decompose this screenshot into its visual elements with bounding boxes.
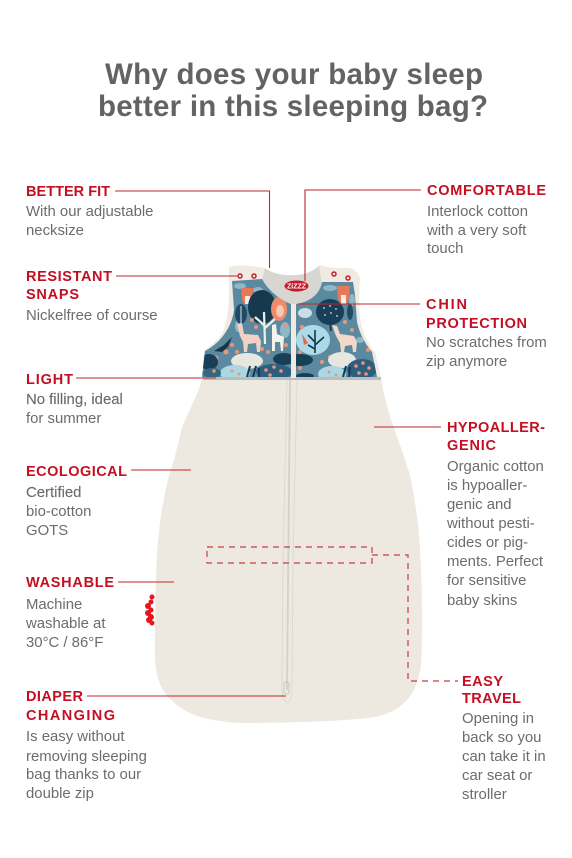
callout: chin protection: No scratches from <box>426 335 547 351</box>
light blue tree circle <box>296 325 330 355</box>
callout: washable: Machine <box>26 597 82 613</box>
callout: easy travel <box>207 547 546 803</box>
brand logo: neck: ZiZZZ <box>287 284 307 290</box>
brand logo: neck <box>284 280 308 292</box>
callout: comfortable <box>305 183 546 281</box>
callout: diaper changing: bag thanks to our <box>26 767 141 783</box>
callout: comfortable: COMFORTABLE <box>427 183 546 199</box>
bushes <box>296 354 313 366</box>
callout: comfortable: touch <box>427 241 463 257</box>
forest print: right panel <box>296 282 377 377</box>
callout: easy travel: back so you <box>462 730 541 746</box>
brand logo: side <box>145 594 154 626</box>
callout: better fit: With our adjustable <box>26 204 153 220</box>
callout: resistant snaps <box>26 269 237 324</box>
callout: washable: washable at <box>25 616 106 632</box>
callout: hypoallergenic: HYPOALLER- <box>447 420 545 436</box>
callout: light: LIGHT <box>26 372 73 388</box>
callout: diaper changing: double zip <box>26 786 94 802</box>
callout: resistant snaps: Nickelfree of course <box>26 308 158 324</box>
callout: light: for summer <box>26 411 101 427</box>
salmon flowers <box>298 320 370 370</box>
forest print: left panel <box>202 279 291 377</box>
snaps <box>238 272 350 280</box>
callout: easy travel: Opening in <box>462 711 534 727</box>
zip placket upper <box>291 304 296 378</box>
callout: easy travel: can take it in <box>462 749 546 765</box>
callout: hypoallergenic: genic and <box>447 497 512 513</box>
callout: resistant snaps: SNAPS <box>26 287 79 303</box>
callout: washable: WASHABLE <box>26 575 114 591</box>
callout: hypoallergenic: baby skins <box>447 593 517 609</box>
foliage <box>323 285 364 343</box>
callout: easy travel: EASY <box>462 674 503 690</box>
inner neck <box>262 266 322 304</box>
squirrel <box>214 337 232 352</box>
callout: hypoallergenic: GENIC <box>447 438 497 454</box>
fox <box>337 286 350 304</box>
callout: light <box>26 372 216 427</box>
zip <box>282 380 297 702</box>
callout: ecological: GOTS <box>26 523 68 539</box>
callout: easy travel: TRAVEL <box>462 691 521 707</box>
callout: better fit: necksize <box>26 223 84 239</box>
callout: diaper changing <box>26 689 286 802</box>
callout: diaper changing: CHANGING <box>26 708 115 724</box>
callout: comfortable: with a very soft <box>426 223 527 239</box>
bushes <box>203 354 218 370</box>
small dark tree <box>235 304 247 324</box>
fox <box>241 288 253 304</box>
large tree <box>248 290 276 324</box>
salmon flowers <box>214 318 288 360</box>
callout: light: No filling, ideal <box>26 392 123 408</box>
callout: hypoallergenic: ments. Perfect <box>447 554 544 570</box>
callout: comfortable: Interlock cotton <box>427 204 528 220</box>
callout: hypoallergenic: Organic cotton <box>447 459 544 475</box>
callout: chin protection: PROTECTION <box>426 316 527 332</box>
title: better in this sleeping bag? <box>98 90 488 123</box>
callout: ecological: Certified <box>26 485 81 501</box>
bag body <box>155 379 422 723</box>
sleeping bag illustration <box>155 265 422 723</box>
callout: better fit: BETTER FIT <box>26 184 110 200</box>
callout: easy travel: stroller <box>462 787 507 803</box>
title <box>98 58 488 123</box>
callout: ecological <box>26 464 191 539</box>
callout: washable <box>25 575 174 651</box>
callout: washable: 30°C / 86°F <box>26 635 103 651</box>
callout: easy travel: car seat or <box>462 768 532 784</box>
callout: hypoallergenic: without pesti- <box>446 516 535 532</box>
callout: diaper changing: DIAPER <box>26 689 84 705</box>
callout: hypoallergenic <box>374 420 545 609</box>
deer two <box>272 324 284 351</box>
callout: hypoallergenic: for sensitive <box>447 573 526 589</box>
title: Why does your baby sleep <box>105 58 483 91</box>
callout: ecological: bio-cotton <box>26 504 91 520</box>
callout: diaper changing: Is easy without <box>26 729 125 745</box>
callout: ecological: ECOLOGICAL <box>26 464 127 480</box>
scattered foliage <box>234 283 290 338</box>
callout: chin protection: zip anymore <box>426 354 507 370</box>
collar and shoulders <box>202 265 381 378</box>
callout: chin protection: CHIN <box>426 297 467 313</box>
callout: chin protection <box>298 297 547 370</box>
orange owl <box>271 297 287 321</box>
callout: hypoallergenic: is hypoaller- <box>447 478 527 494</box>
callout: resistant snaps: RESISTANT <box>26 269 112 285</box>
deer <box>332 325 357 352</box>
deer one <box>237 323 261 352</box>
hem band <box>203 377 381 380</box>
callout: better fit <box>26 184 270 268</box>
callout: diaper changing: removing sleeping <box>26 749 147 765</box>
bunny <box>298 308 312 318</box>
dotted tree <box>316 299 344 325</box>
callout: hypoallergenic: cides or pig- <box>447 535 528 551</box>
